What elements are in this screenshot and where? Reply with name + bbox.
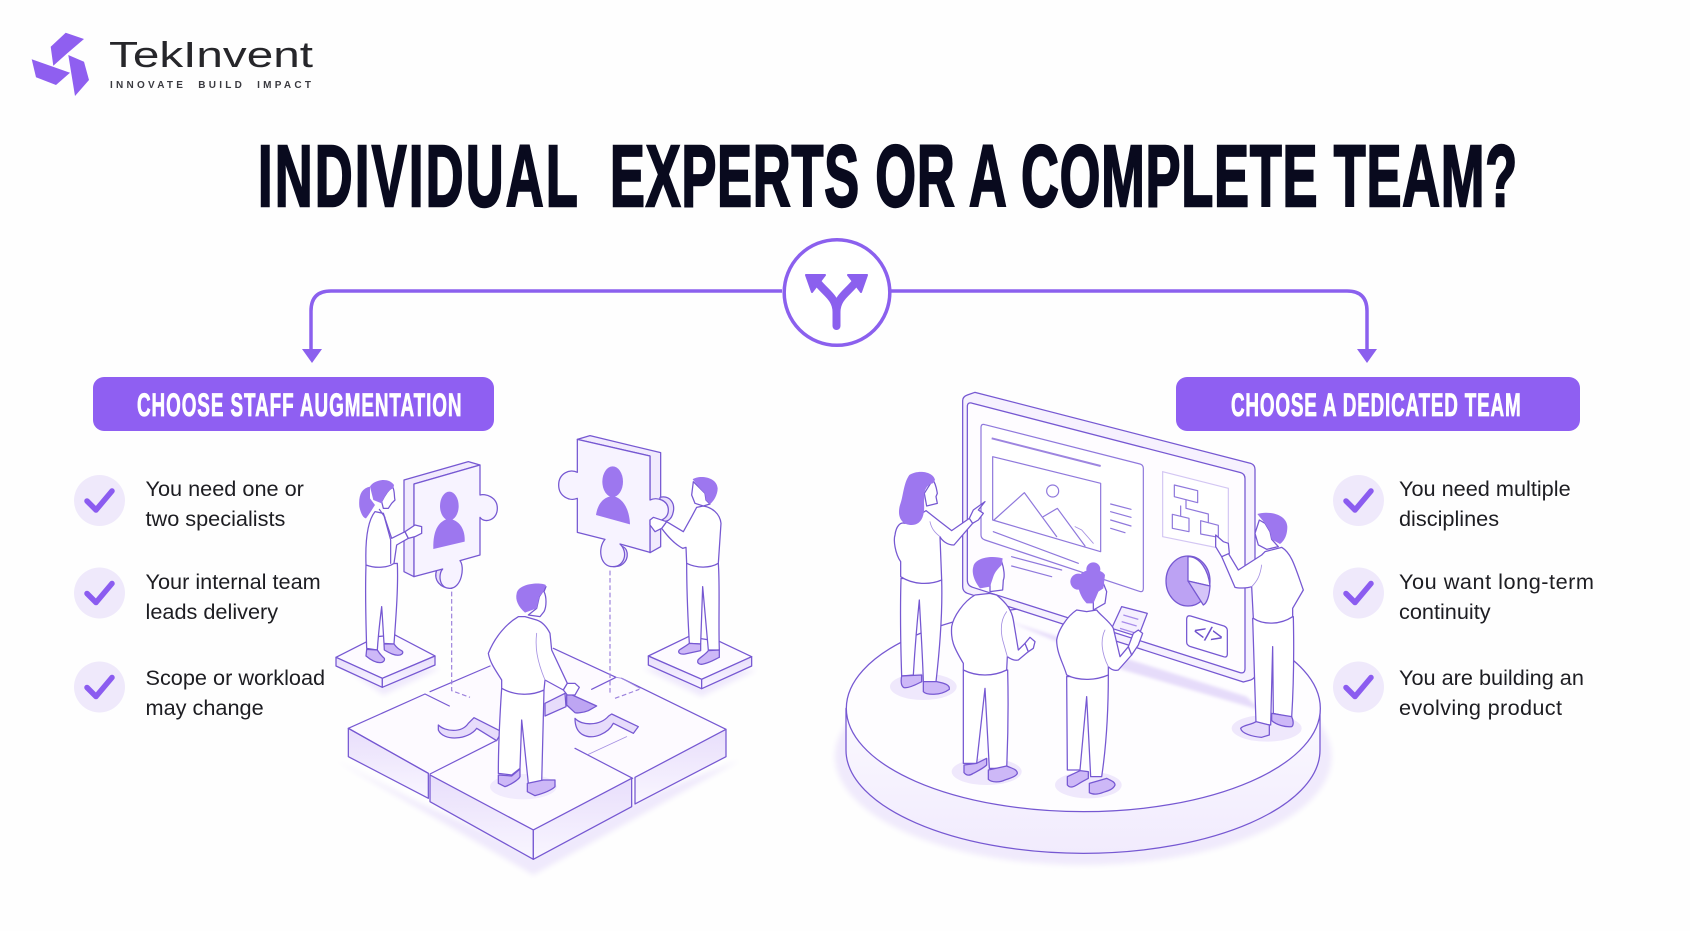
item: scope or workload: may change bbox=[146, 695, 264, 720]
board shadow bbox=[1010, 622, 1260, 710]
item: one or two specialists: You need one or bbox=[146, 476, 304, 501]
item: internal team: Your internal team bbox=[146, 569, 321, 594]
arrow: left branch bbox=[302, 291, 782, 363]
right floating puzzle piece bbox=[559, 436, 674, 567]
panel: staff augmentation heading: CHOOSE STAFF AUGMENTATION bbox=[137, 387, 462, 423]
item: scope or workload: Scope or workload bbox=[146, 665, 325, 690]
arrow: right branch bbox=[891, 291, 1377, 363]
illustration: team at digital board bbox=[835, 392, 1332, 865]
panel: dedicated team heading: CHOOSE A DEDICATED TEAM bbox=[1231, 387, 1521, 423]
person: man standing bbox=[951, 557, 1035, 785]
puzzle base platform bbox=[348, 648, 726, 859]
item: multiple disciplines: You need multiple bbox=[1399, 476, 1571, 501]
item: evolving product: You are building an bbox=[1399, 665, 1584, 690]
icon: logo mark bbox=[32, 33, 89, 96]
content panel bbox=[981, 424, 1143, 592]
person: man pointing at chart bbox=[1216, 513, 1303, 742]
item: long-term continuity: You want long-term bbox=[1399, 569, 1594, 594]
pie chart bbox=[1166, 556, 1210, 606]
item: one or two specialists: two specialists bbox=[146, 506, 285, 531]
item: multiple disciplines: disciplines bbox=[1399, 506, 1499, 531]
circular stage bbox=[835, 605, 1332, 865]
flowchart panel bbox=[1163, 472, 1228, 550]
logo wordmark: TekInvent bbox=[109, 34, 313, 75]
person: man on platform bbox=[488, 583, 579, 799]
title: INDIVIDUAL bbox=[258, 128, 578, 225]
item: multiple disciplines bbox=[1333, 475, 1571, 531]
person: woman holding piece bbox=[359, 480, 422, 663]
item: evolving product: evolving product bbox=[1399, 695, 1562, 720]
dashed guide lines bbox=[452, 571, 639, 698]
right platform bbox=[648, 637, 752, 689]
panel: dedicated team heading bbox=[1176, 377, 1580, 431]
logo bbox=[32, 33, 313, 96]
title: EXPERTS OR A COMPLETE TEAM? bbox=[610, 128, 1517, 225]
person: woman pointing bbox=[890, 472, 985, 700]
item: evolving product bbox=[1333, 662, 1584, 720]
panel: staff augmentation heading bbox=[93, 377, 494, 431]
logo tagline: INNOVATE BUILD IMPACT bbox=[110, 80, 311, 91]
item: scope or workload bbox=[74, 662, 325, 720]
item: internal team: leads delivery bbox=[146, 599, 278, 624]
person: woman with tablet bbox=[1055, 562, 1147, 798]
code tag box: </> bbox=[1191, 620, 1225, 649]
item: internal team bbox=[74, 568, 321, 624]
display board bbox=[963, 392, 1255, 682]
person: man holding piece bbox=[650, 477, 721, 664]
left platform bbox=[336, 635, 435, 687]
item: long-term continuity: continuity bbox=[1399, 599, 1491, 624]
decision connector arrows bbox=[302, 291, 1377, 363]
item: one or two specialists bbox=[74, 475, 304, 531]
left floating puzzle piece bbox=[404, 462, 497, 588]
checklist: dedicated team bbox=[1333, 475, 1594, 720]
item: long-term continuity bbox=[1333, 568, 1594, 624]
shadows bbox=[335, 667, 757, 875]
code tag box bbox=[1187, 616, 1227, 657]
illustration: puzzle pieces and specialists bbox=[335, 436, 757, 875]
icon: split path in circle bbox=[784, 240, 890, 345]
checklist: staff augmentation bbox=[74, 475, 325, 720]
